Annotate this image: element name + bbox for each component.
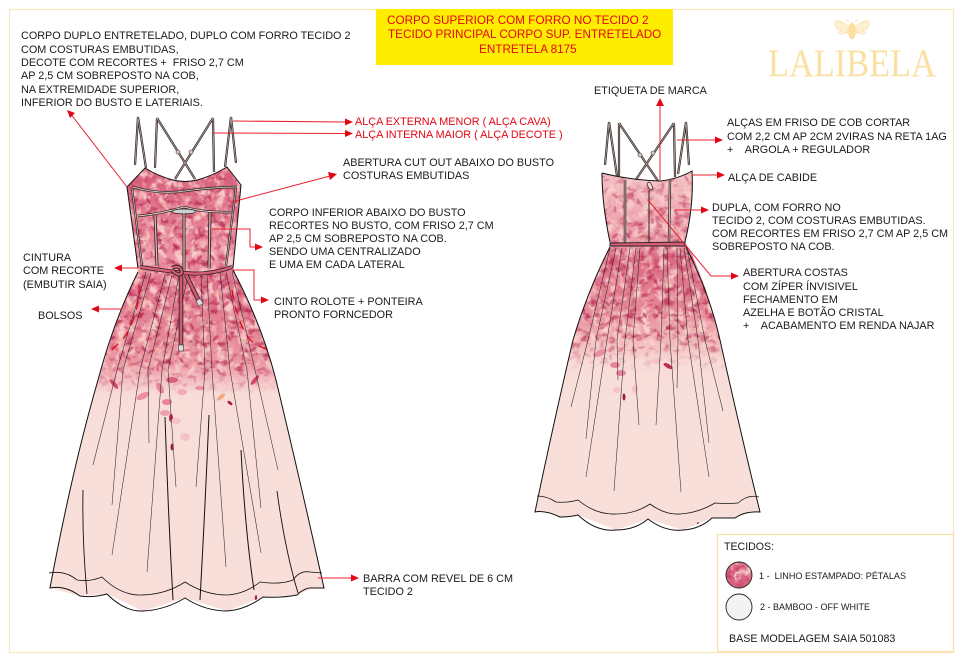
annotation: double body [712, 202, 948, 253]
annotation: body front top-left: NA EXTREMIDADE SUPERIOR, [21, 84, 179, 96]
annotation: lower body: SENDO UMA CENTRALIZADO [269, 246, 421, 258]
front dress outline [127, 167, 241, 268]
arrow: outer strap [233, 118, 353, 126]
annotation: belt: PRONTO FORNCEDOR [274, 309, 393, 321]
annotation: hem: TECIDO 2 [363, 586, 413, 598]
annotation: back opening [743, 267, 935, 332]
annotation: double body: COM RECORTES EM FRISO 2,7 CM AP 2,5 CM [712, 228, 948, 240]
annotation: double body: DUPLA, COM FORRO NO [712, 202, 841, 214]
annotation: belt: CINTO ROLOTE + PONTEIRA [274, 296, 423, 308]
annotation: back opening: + ACABAMENTO EM RENDA NAJAR [743, 320, 935, 332]
back belt [610, 242, 685, 246]
annotation: waist: COM RECORTE [23, 265, 104, 277]
annotation: hem [363, 573, 513, 598]
bodice seams [132, 187, 237, 270]
annotation: body front top-left: DECOTE COM RECORTES + FRISO 2,7 CM [21, 57, 244, 69]
swatch: printed linen [726, 562, 752, 588]
arrow: brand tag [656, 98, 664, 180]
arrow: belt [233, 270, 269, 304]
label: hanger strap: ALÇA DE CABIDE [728, 172, 817, 184]
label: inner strap: ALÇA INTERNA MAIOR ( ALÇA DECOTE ) [355, 129, 563, 141]
annotation: body front top-left [21, 30, 351, 109]
title: fabric note box: ENTRETELA 8175 [479, 43, 577, 56]
annotation: waist: CINTURA [23, 252, 72, 264]
back skirt pleats [571, 248, 723, 492]
label: pockets: BOLSOS [38, 310, 83, 322]
annotation: back opening: ABERTURA COSTAS [743, 267, 848, 279]
logo: Lalibela with bee: LALIBELA [768, 42, 936, 85]
front dress fabric print [50, 168, 324, 610]
arrow: back opening [648, 200, 739, 280]
annotation: lower body: AP 2,5 CM SOBREPOSTO NA COB. [269, 233, 447, 245]
label: fabric 1: 1 - LINHO ESTAMPADO: PÉTALAS [759, 571, 906, 581]
label: brand tag: ETIQUETA DE MARCA [594, 85, 708, 97]
annotation: lower body [269, 207, 494, 271]
icon: bee [835, 19, 869, 39]
annotation: waist [23, 252, 107, 291]
hem revel line [49, 572, 322, 595]
back dress illustration [530, 122, 765, 535]
arrow: inner strap [212, 130, 353, 137]
title: fabric note box: TECIDO PRINCIPAL CORPO SUP. ENTRETELADO [388, 28, 661, 41]
annotation: back straps: COM 2,2 CM AP 2CM 2VIRAS NA RETA 1AG [727, 131, 947, 143]
label: outer strap: ALÇA EXTERNA MENOR ( ALÇA CAVA) [355, 116, 551, 128]
front straps [135, 117, 236, 179]
back dress fabric print [530, 165, 765, 535]
arrow: double body [675, 206, 709, 214]
arrow: to body note [67, 110, 127, 187]
annotation: lower body: RECORTES NO BUSTO, COM FRISO 2,7 CM [269, 220, 494, 232]
annotation: body front top-left: INFERIOR DO BUSTO E LATERIAIS. [21, 97, 203, 109]
annotation: lower body: E UMA EM CADA LATERAL [269, 259, 405, 271]
annotation: body front top-left: COM COSTURAS EMBUTIDAS, [21, 44, 179, 56]
swatch: off white [726, 594, 752, 620]
annotation: cut out [343, 157, 554, 182]
annotation: waist: (EMBUTIR SAIA) [23, 279, 107, 291]
back bodice seams [625, 180, 670, 243]
heading: fabrics: TECIDOS: [724, 541, 774, 553]
annotation: body front top-left: CORPO DUPLO ENTRETELADO, DUPLO COM FORRO TECIDO 2 [21, 30, 351, 42]
skirt pleats [83, 271, 298, 600]
arrow: waist [114, 264, 138, 272]
annotation: back straps: ALÇAS EM FRISO DE COB CORTAR [727, 117, 910, 129]
arrow: hem [318, 574, 359, 582]
front dress illustration [40, 117, 335, 620]
note: base pattern: BASE MODELAGEM SAIA 501083 [729, 633, 895, 645]
panel: fabrics legend [718, 534, 954, 652]
annotation: belt [274, 296, 423, 321]
annotation: back opening: AZELHA E BOTÃO CRISTAL [743, 306, 884, 319]
arrow: back straps [677, 136, 723, 144]
annotation: back straps [727, 117, 947, 156]
annotation: double body: TECIDO 2, COM COSTURAS EMBUTIDAS. [712, 215, 926, 227]
annotation: back opening: FECHAMENTO EM [743, 294, 838, 306]
label: fabric 2: 2 - BAMBOO - OFF WHITE [760, 602, 870, 612]
annotation: double body: SOBREPOSTO NA COB. [712, 241, 835, 253]
annotation: hem: BARRA COM REVEL DE 6 CM [363, 573, 513, 585]
pockets: red dashed [106, 285, 139, 355]
arrow: lower body [212, 229, 263, 250]
belt [140, 267, 232, 351]
annotation: back straps: + ARGOLA + REGULADOR [727, 144, 870, 156]
back straps [605, 122, 689, 181]
annotation: back opening: COM ZÍPER ÍNVISIVEL [743, 280, 858, 293]
arrow: pockets [91, 306, 122, 312]
arrow: cut out [232, 172, 337, 202]
annotation: body front top-left: AP 2,5 CM SOBREPOSTO NA COB, [21, 70, 199, 82]
annotation: lower body: CORPO INFERIOR ABAIXO DO BUSTO [269, 207, 466, 219]
arrow: hanger strap [692, 172, 725, 178]
title: fabric note box [376, 9, 673, 65]
logo: Lalibela with bee [768, 19, 936, 85]
annotation: cut out: COSTURAS EMBUTIDAS [343, 170, 469, 182]
back dress outline [602, 171, 692, 242]
title: fabric note box: CORPO SUPERIOR COM FORRO NO TECIDO 2 [387, 14, 649, 27]
annotation: cut out: ABERTURA CUT OUT ABAIXO DO BUSTO [343, 157, 554, 169]
